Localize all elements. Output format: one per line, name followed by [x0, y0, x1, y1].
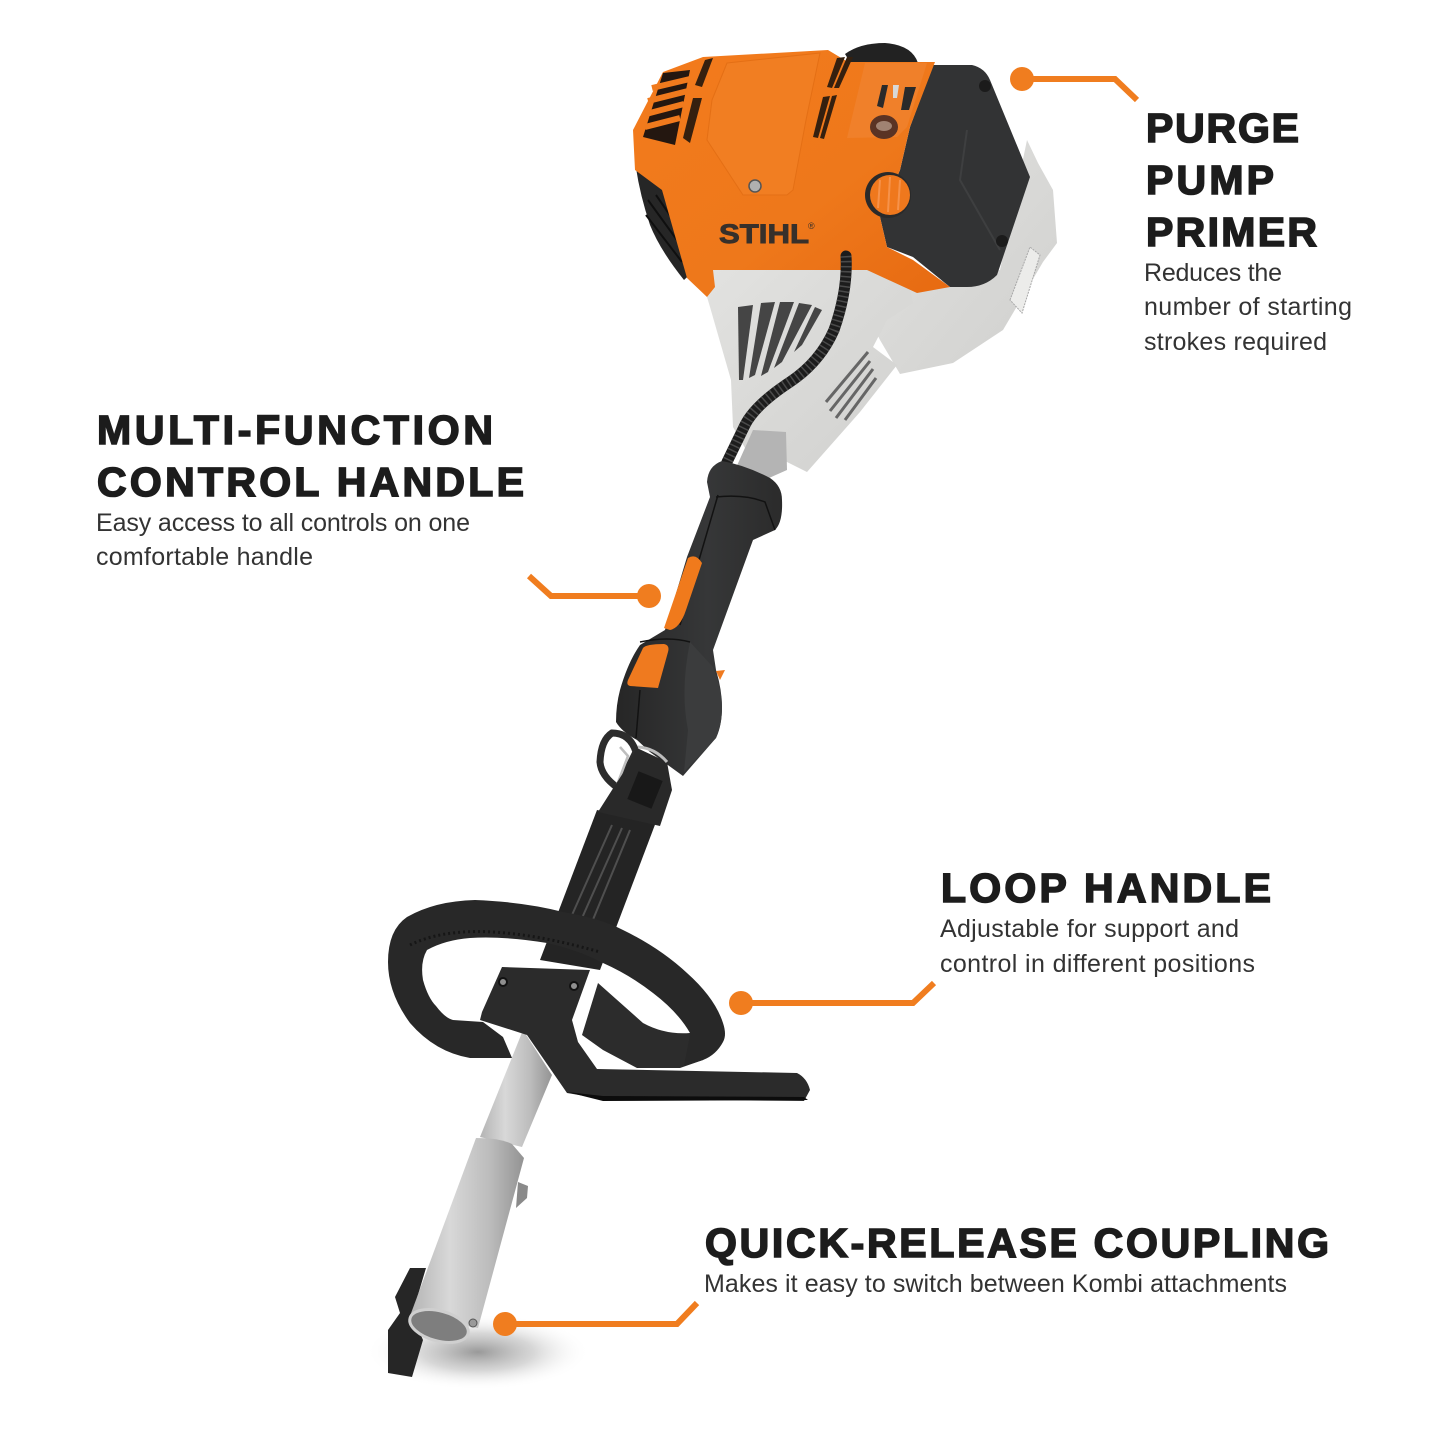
- heading: CONTROL HANDLE: [97, 459, 524, 505]
- label on rear housing: [1010, 247, 1040, 313]
- description: comfortable handle: [96, 543, 313, 571]
- clamp bolt: [516, 1182, 528, 1208]
- leader: purge pump primer: [1010, 67, 1137, 100]
- left cooling slots: [643, 70, 690, 145]
- heading: MULTI-FUNCTION: [97, 407, 493, 453]
- screw: [749, 180, 761, 192]
- left black cooling cover: [636, 168, 699, 280]
- control handle: [616, 461, 782, 776]
- front vents: [738, 302, 822, 380]
- air filter cover: [880, 65, 1030, 287]
- black shaft: [540, 810, 656, 970]
- description: [940, 915, 1255, 978]
- cover centre panel: [707, 53, 820, 195]
- lever underside: [567, 1092, 808, 1101]
- lower vents: [826, 352, 876, 420]
- ground shadow: [366, 1314, 590, 1390]
- silver shaft stub: [735, 430, 787, 482]
- leader: quick-release coupling: [493, 1303, 697, 1336]
- description: Reduces the: [1144, 259, 1282, 287]
- description: [1144, 259, 1352, 356]
- handle bulb facet: [684, 642, 722, 772]
- top slots left: [683, 58, 713, 143]
- description: number of starting: [1144, 293, 1352, 321]
- shaft ridges: [572, 825, 630, 922]
- heading: QUICK-RELEASE COUPLING: [705, 1220, 1329, 1266]
- bracket screws: [499, 978, 578, 990]
- callout: purge pump primer: [1144, 105, 1352, 356]
- leader: control handle: [529, 576, 661, 608]
- callout: multi-function control handle: [96, 407, 524, 571]
- description: strokes required: [1144, 328, 1327, 356]
- bracket and lever: [480, 967, 810, 1101]
- description: Makes it easy to switch between Kombi attachments: [704, 1270, 1287, 1298]
- orange trigger: [664, 556, 702, 630]
- heading: PUMP: [1146, 157, 1274, 203]
- leader: loop handle: [729, 983, 934, 1015]
- choke knob: [865, 172, 911, 218]
- heading: PURGE: [1146, 105, 1299, 151]
- description: [96, 509, 470, 571]
- description: Easy access to all controls on one: [96, 509, 470, 537]
- mouth bolt: [469, 1319, 477, 1327]
- grey front housing: [707, 270, 913, 472]
- silver lower tube: [480, 1030, 552, 1147]
- registered mark: ®: [808, 221, 815, 231]
- heading: [97, 407, 524, 505]
- fuel hose: [727, 256, 846, 462]
- loop handle rear strap: [582, 983, 725, 1068]
- knob grip lines: [878, 177, 900, 212]
- pull-start top: [845, 43, 918, 63]
- grip texture: [410, 932, 600, 952]
- description: control in different positions: [940, 950, 1255, 978]
- screw holes: [979, 80, 1008, 247]
- heading: LOOP HANDLE: [941, 865, 1271, 911]
- carburettor window: [847, 63, 927, 138]
- heading: [1146, 105, 1317, 255]
- orange engine cover: [633, 50, 950, 297]
- description: Adjustable for support and: [940, 915, 1239, 943]
- primer bulb: [870, 115, 898, 139]
- coupling tube: [410, 1138, 524, 1328]
- clamp silver arc: [638, 747, 667, 762]
- clamp: [598, 748, 672, 826]
- product illustration: STIHL Kombi engine: [366, 43, 1057, 1390]
- orange lock tip: [716, 670, 725, 680]
- wing nut foot: [388, 1268, 426, 1377]
- carabiner ring: [600, 733, 636, 788]
- handle seams: [636, 495, 775, 738]
- clamp latch: [627, 771, 663, 809]
- coupling mouth: [406, 1304, 472, 1348]
- STIHL logo: STIHL: [719, 219, 809, 249]
- top slots right: [813, 57, 853, 139]
- loop handle: [388, 900, 725, 1066]
- callout: loop handle: [940, 865, 1271, 978]
- callout: quick-release coupling: [704, 1220, 1329, 1298]
- filter cover facet: [960, 130, 1000, 250]
- rear grey housing: [860, 140, 1057, 374]
- quick release coupling: [388, 1138, 528, 1377]
- orange throttle switch: [627, 644, 668, 688]
- heading: PRIMER: [1146, 209, 1317, 255]
